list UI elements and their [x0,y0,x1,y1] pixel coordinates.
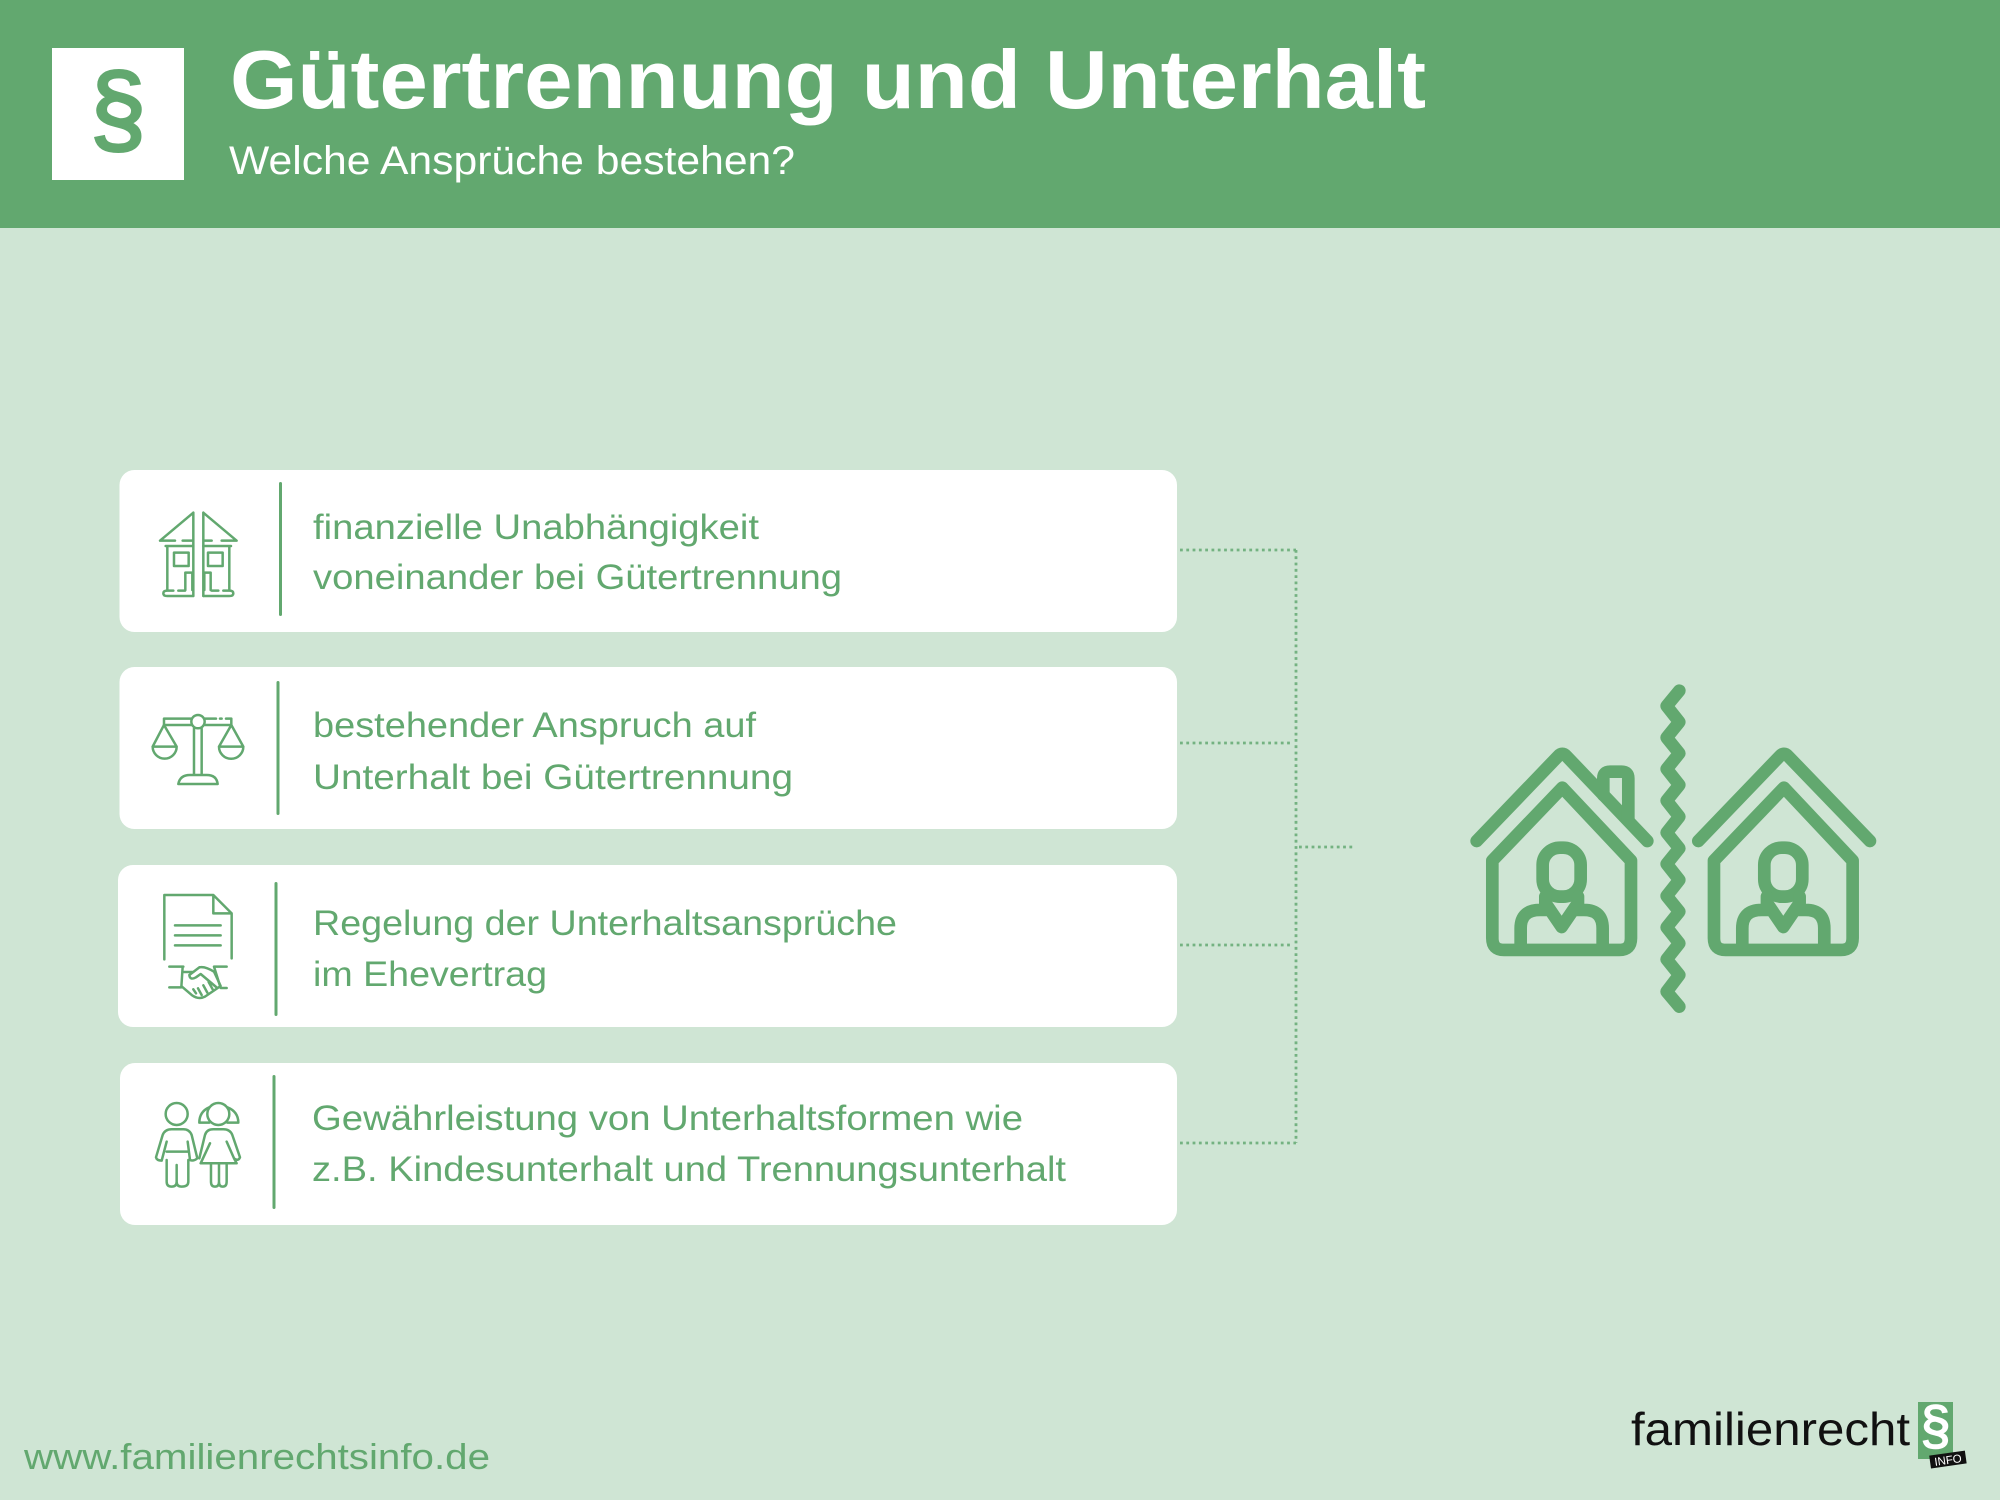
icon: paragraph sign: § [90,53,146,165]
panel: Anspruch auf Unterhalt [120,667,1177,829]
text block: z.B. Kindesunterhalt und Trennungsunterhalt [312,1150,1066,1189]
subtitle: Welche Ansprüche bestehen? [229,139,795,183]
text block [313,508,842,597]
left house with person [1477,754,1647,950]
icon: contract with handshake [164,895,232,998]
website url: www.familienrechtsinfo.de [23,1436,490,1477]
divider [276,681,280,815]
panel: finanzielle Unabhängigkeit [120,470,1177,632]
icon: split house [160,513,237,596]
icon: scales [153,715,243,784]
icon: two children [156,1103,240,1187]
text block: Gewährleistung von Unterhaltsformen wie [312,1099,1023,1138]
text block [313,904,897,994]
text block [312,1099,1066,1189]
divider [279,482,282,616]
logo [1631,1396,1967,1469]
title: Gütertrennung und Unterhalt [230,33,1426,126]
icon: two separated houses [1477,691,1870,1007]
connector lines [1180,550,1355,1143]
panel: Gewährleistung von Unterhaltsformen [120,1063,1177,1225]
zigzag divider [1667,691,1679,1007]
text block: finanzielle Unabhängigkeit [313,508,759,547]
text block: bestehender Anspruch auf [313,706,756,745]
logo mark: § [1920,1396,1951,1456]
divider [272,1075,276,1209]
logo mark: INFO [1934,1453,1963,1469]
text block [313,706,793,797]
text block: im Ehevertrag [313,955,547,994]
logo mark [1918,1396,1967,1469]
right house with person [1698,754,1870,950]
text block: Unterhalt bei Gütertrennung [313,758,793,797]
header band [0,0,2000,228]
panel: Regelung im Ehevertrag [118,865,1177,1027]
text block: voneinander bei Gütertrennung [313,558,842,597]
logo: familienrecht [1631,1403,1910,1455]
text block: Regelung der Unterhaltsansprüche [313,904,897,943]
icon: paragraph sign [52,48,184,180]
divider [274,882,278,1016]
